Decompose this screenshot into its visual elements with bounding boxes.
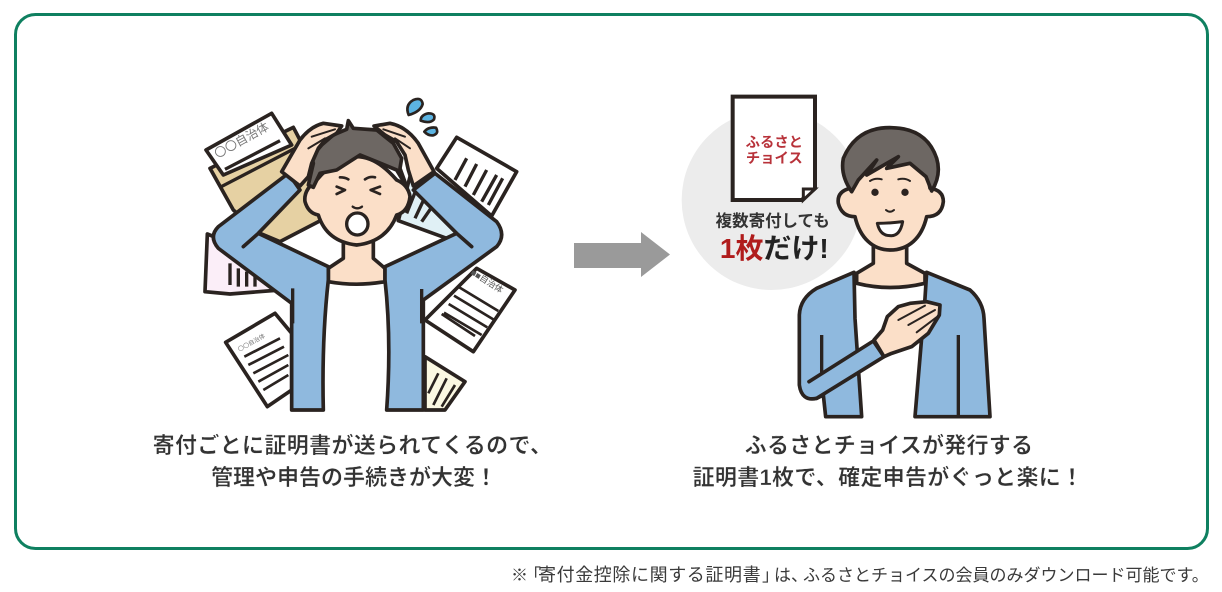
- footnote: ※: [511, 566, 528, 585]
- footnote: ふるさとチョイスの会員のみダウンロード可能です。: [803, 566, 1209, 585]
- card: municipality card: [206, 113, 292, 175]
- person: left hand on head: [282, 123, 342, 186]
- footnote: 、: [791, 566, 808, 585]
- person: jacket right: [915, 272, 990, 417]
- caption: left: [153, 433, 552, 490]
- person: hair: [308, 121, 407, 187]
- person: pained eyes and brows: [337, 177, 380, 194]
- person: hair: [843, 128, 938, 192]
- document: single certificate: [733, 97, 815, 200]
- caption: left: 管理や申告の手続きが大変！: [211, 465, 497, 490]
- envelope: tan envelope: [210, 127, 322, 242]
- footnote: 寄付金控除に関する証明書: [538, 565, 761, 585]
- paper: pink document: [205, 234, 280, 294]
- caption: right: [693, 433, 1083, 490]
- arrow: gray right arrow: [574, 232, 670, 277]
- document: single certificate: チョイス: [746, 150, 803, 167]
- badge: gray circle: [682, 110, 862, 290]
- illustration: relieved person with a single certificate: [682, 97, 990, 417]
- document: single certificate: ふるさと: [746, 134, 803, 151]
- person: neck: [857, 242, 925, 287]
- person: right sleeve and cardigan: [385, 173, 502, 410]
- label: 複数寄付しても: 複数寄付しても: [716, 210, 830, 230]
- card: municipality card: 〇〇自治体: [212, 120, 271, 161]
- paper: light blue document: [398, 177, 467, 238]
- icon: sweat drops: [407, 99, 437, 135]
- caption: right: 証明書1枚で、確定申告がぐっと楽に！: [693, 465, 1083, 490]
- person: eyes and brows: [870, 179, 910, 212]
- person: hand on chest: [874, 302, 940, 357]
- caption: right: ふるさとチョイスが発行する: [745, 433, 1033, 458]
- person: right hand on head: [374, 123, 434, 186]
- illustration: overwhelmed person surrounded by certificates: [205, 99, 517, 410]
- paper: bottom left document: [226, 313, 292, 407]
- person: white shirt: [857, 282, 923, 417]
- paper: right middle document: [425, 266, 515, 352]
- person: head: [305, 121, 410, 245]
- person: smiling mouth: [877, 222, 903, 236]
- paper: bottom right cream document: [425, 357, 465, 410]
- person: open mouth: [347, 213, 368, 235]
- person: jacket left: [799, 272, 862, 417]
- person: head: [838, 128, 943, 250]
- footnote: 」: [762, 566, 779, 585]
- person: left sleeve and cardigan: [213, 173, 328, 410]
- footnote: 「: [524, 566, 541, 585]
- paper: right middle document: ■■自治体: [469, 266, 506, 295]
- footnote: は: [774, 566, 791, 585]
- person: white shirt: [327, 280, 387, 410]
- person: forearm sleeve: [808, 341, 884, 398]
- paper: top right document: [437, 137, 517, 216]
- caption: left: 寄付ごとに証明書が送られてくるので、: [153, 433, 552, 458]
- person: neck and chest: [328, 240, 385, 284]
- paper: bottom left document: 〇〇自治体: [236, 332, 266, 353]
- label: 1枚だけ!: 1枚だけ!: [720, 233, 829, 264]
